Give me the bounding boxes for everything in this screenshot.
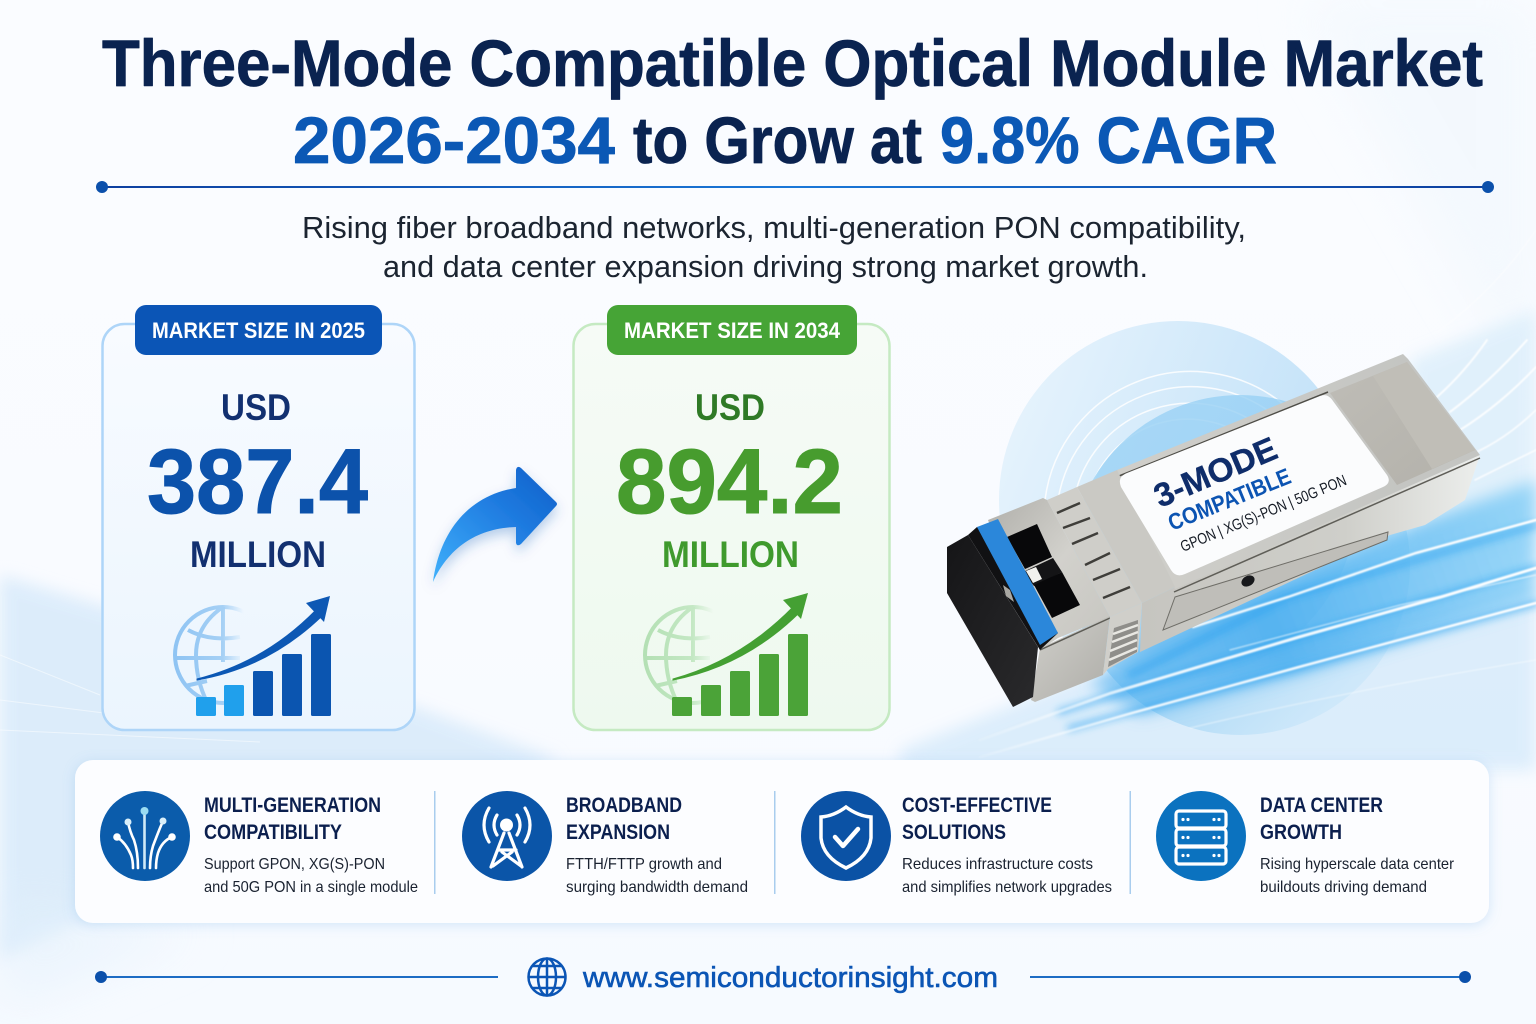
module side body [1140,455,1480,652]
title: 2026-2034 [293,103,615,177]
value: USD 387.4 million: MILLION [190,534,326,575]
product label [1120,395,1389,575]
driver: broadband expansion [462,791,748,896]
badge: market size in 2034 [607,305,857,355]
driver: broadband expansion: FTTH/FTTP growth and [566,856,722,873]
icon: server rack [1156,791,1246,881]
value: USD 387.4 million: 387.4 [147,431,368,533]
driver: multi-generation compatibility [100,791,418,896]
badge: market size in 2025: MARKET SIZE IN 2025 [152,318,365,343]
icon: globe and growth chart [175,596,331,716]
value: USD 894.2 million: USD [695,387,765,428]
blue pull tab [977,519,1058,645]
driver: broadband expansion: EXPANSION [566,821,670,844]
cage front [988,498,1110,650]
value: USD 894.2 million [616,387,843,575]
footer: website [95,958,1471,996]
driver: broadband expansion: surging bandwidth demand [566,879,748,896]
title: 9.8% CAGR [940,103,1277,177]
driver: cost-effective solutions: and simplifies network upgrades [902,879,1112,896]
value: USD 894.2 million: 894.2 [616,431,843,533]
title: Three-Mode Compatible Optical Module Market [102,26,1483,100]
arrow: growth direction [433,467,557,582]
badge: market size in 2034: MARKET SIZE IN 2034 [624,318,841,343]
front band [1077,470,1175,603]
icon: optical transceiver module [947,354,1480,707]
footer: website: www.semiconductorinsight.com [582,962,998,994]
driver: cost-effective solutions: COST-EFFECTIVE [902,794,1052,817]
product label: GPON | XG(S)-PON | 50G PON [1178,472,1349,556]
icon: fiber strands [100,791,190,881]
black dust cap [947,527,1058,707]
driver: multi-generation compatibility: COMPATIBILITY [204,821,342,844]
value: USD 894.2 million: MILLION [662,534,799,575]
driver: broadband expansion: BROADBAND [566,794,682,817]
driver: data center growth [1156,791,1455,896]
icon: signal tower [462,791,552,881]
product label: COMPATIBLE [1164,463,1294,536]
icon: shield check [801,791,891,881]
module top surface [1117,354,1480,589]
driver: cost-effective solutions [801,791,1112,896]
driver: cost-effective solutions: SOLUTIONS [902,821,1006,844]
title: to Grow at [633,103,922,177]
badge: market size in 2025 [135,305,382,355]
subtitle: and data center expansion driving strong market growth. [383,249,1148,284]
subtitle [302,210,1246,284]
icon: globe [528,958,566,996]
driver: data center growth: DATA CENTER [1260,794,1383,817]
icon: globe and growth chart [645,593,808,716]
latch tabs [1047,487,1142,617]
driver: data center growth: buildouts driving demand [1260,879,1427,896]
panel: market size 2034 [574,305,890,730]
driver: cost-effective solutions: Reduces infrastructure costs [902,856,1093,873]
panel: key drivers [75,760,1489,923]
driver: data center growth: GROWTH [1260,821,1342,844]
driver: multi-generation compatibility: Support GPON, XG(S)-PON [204,856,385,873]
panel: market size 2025 [102,305,414,730]
fiber ports [1023,558,1062,586]
subtitle: Rising fiber broadband networks, multi-generation PON compatibility, [302,210,1246,245]
background: halo circles and light streaks [980,230,1536,757]
title [102,26,1483,177]
driver: multi-generation compatibility: and 50G PON in a single module [204,879,418,896]
value: USD 387.4 million [147,387,368,575]
driver: multi-generation compatibility: MULTI-GENERATION [204,794,381,817]
driver: data center growth: Rising hyperscale data center [1260,856,1455,873]
product label: 3-MODE [1148,430,1282,514]
value: USD 387.4 million: USD [221,387,291,428]
